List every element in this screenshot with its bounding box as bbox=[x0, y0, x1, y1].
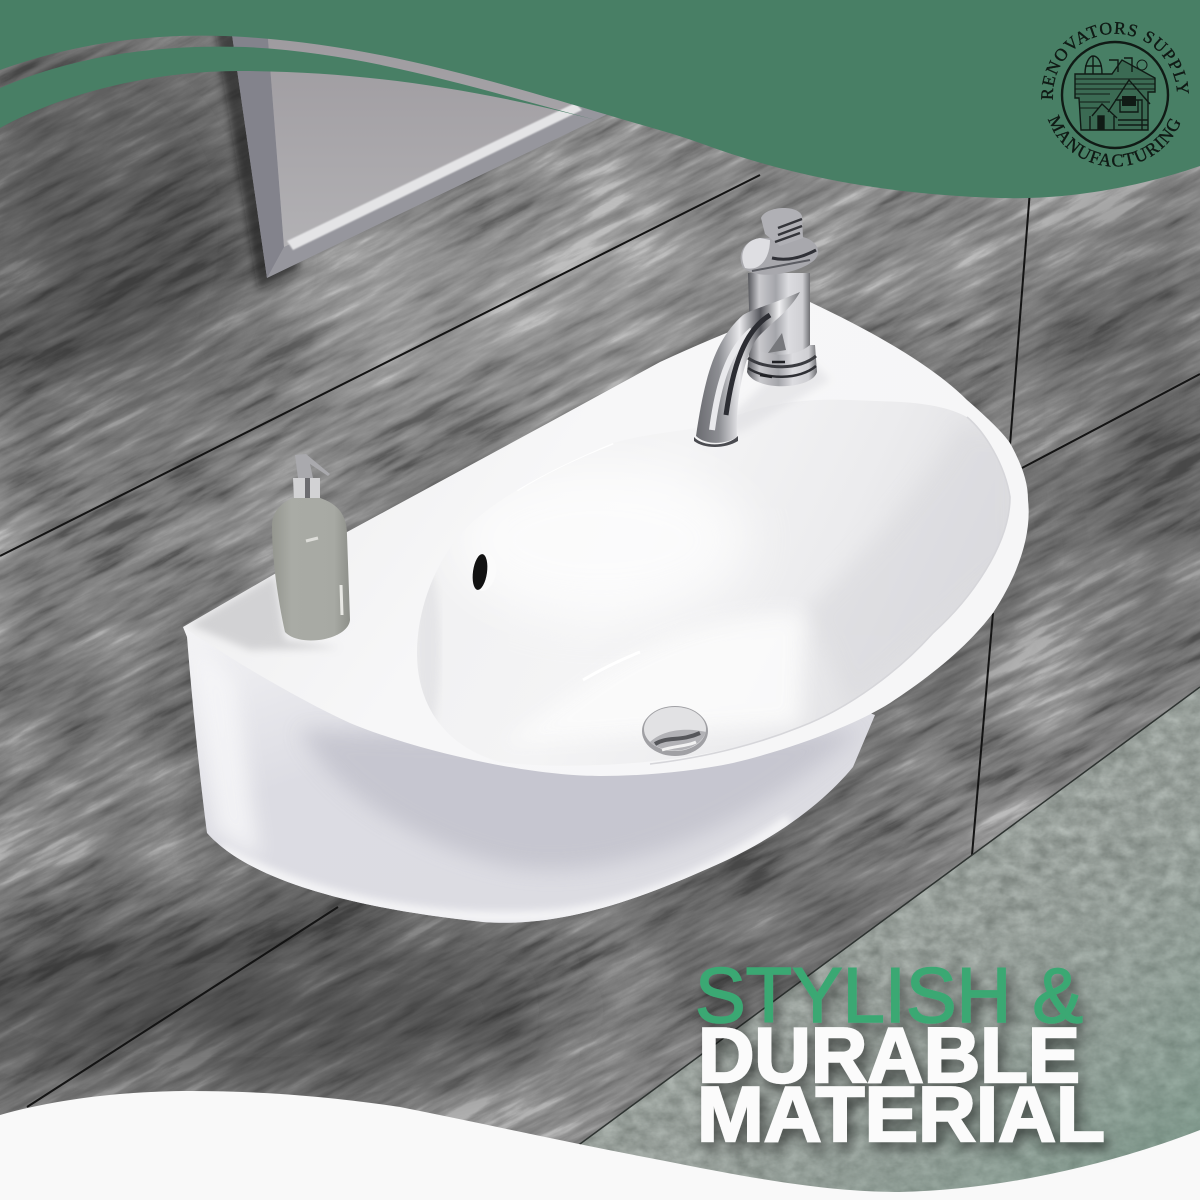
faucet spout bbox=[696, 292, 800, 443]
sink rim and deck bbox=[183, 302, 1029, 776]
drain bbox=[642, 706, 708, 756]
sink underside shading bbox=[190, 640, 860, 917]
faucet reflection on deck bbox=[700, 350, 830, 445]
faucet bbox=[694, 208, 830, 447]
title: stylish and durable material bbox=[695, 951, 1105, 1158]
logo ring bbox=[1062, 42, 1168, 148]
faucet knob bbox=[761, 208, 803, 246]
basin shading bbox=[418, 443, 924, 730]
faucet handle bbox=[741, 237, 818, 275]
bottle shadow bbox=[190, 575, 340, 650]
soap bottle bbox=[190, 454, 350, 650]
title line 3: MATERIAL bbox=[697, 1070, 1105, 1158]
sink shadow on wall bbox=[170, 300, 1045, 929]
bottle body bbox=[272, 498, 350, 641]
rim edge lines bbox=[650, 417, 1010, 764]
title line 1: STYLISH & bbox=[695, 951, 1083, 1039]
floor bbox=[581, 688, 1200, 1192]
bottle pump bbox=[295, 454, 330, 478]
logo: Renovators Supply Manufacturing bbox=[1041, 22, 1189, 167]
overflow hole bbox=[469, 551, 499, 593]
logo: Renovators Supply Manufacturing: MANUFACTURING bbox=[1048, 114, 1180, 167]
title line 2: DURABLE bbox=[698, 1011, 1080, 1099]
logo house icon bbox=[1075, 56, 1155, 130]
logo text: RENOVATORS SUPPLY bbox=[1041, 22, 1189, 100]
bottom white wave bbox=[0, 1091, 1200, 1200]
faucet column bbox=[748, 273, 810, 355]
sink basin bbox=[417, 400, 1010, 766]
faucet base bbox=[747, 345, 817, 386]
sink bbox=[170, 300, 1045, 929]
sink pedestal body bbox=[183, 627, 875, 923]
mirror bbox=[210, 0, 620, 290]
top green wave banner bbox=[0, 0, 1200, 198]
